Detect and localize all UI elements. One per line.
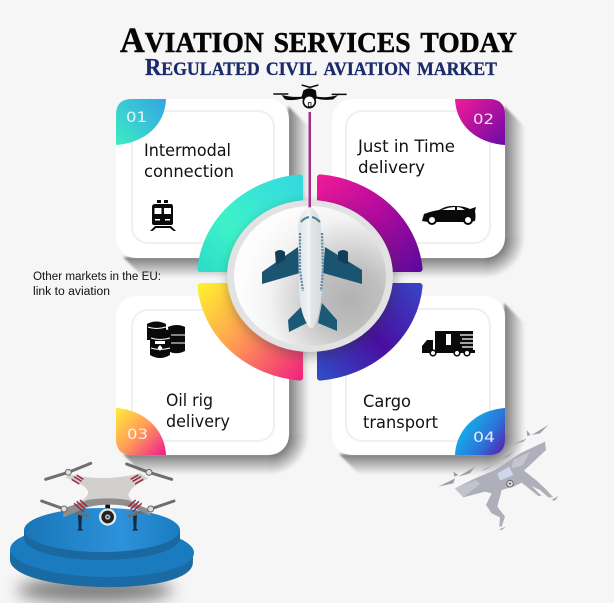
propellers: [42, 463, 174, 516]
icon: train: [150, 200, 176, 231]
panel: oil rig delivery: [116, 296, 289, 455]
drone: [42, 463, 174, 531]
icon: top drone: [273, 85, 347, 108]
panel: just in time delivery: [332, 99, 505, 258]
number 01: 01: [126, 110, 147, 126]
number 03: 03: [127, 427, 148, 443]
arm stripes: [72, 475, 143, 512]
label: intermodal connection: Intermodal: [144, 141, 231, 160]
engines: [275, 250, 348, 265]
panel: cargo transport: [332, 296, 505, 455]
panel: intermodal connection: [116, 99, 289, 258]
tail: [288, 303, 337, 332]
number tab 04: [455, 408, 505, 455]
number tab 02: [455, 99, 505, 145]
note: other markets: Other markets in the EU:: [33, 271, 161, 283]
label line: transport: transport: [363, 413, 439, 432]
lower disc: [9, 523, 195, 589]
label: oil rig: Oil rig: [166, 391, 213, 410]
icon: airplane: [262, 207, 362, 332]
blades: [438, 425, 558, 530]
lens: [507, 480, 513, 487]
drone body: [455, 442, 553, 527]
platform shadow: [17, 577, 173, 603]
segment: orange: [200, 286, 300, 378]
camera: [105, 505, 110, 510]
label line: delivery: delivery: [358, 158, 425, 177]
connector line: [308, 112, 311, 208]
label line: delivery: delivery: [166, 412, 230, 431]
segment: teal: [200, 177, 300, 269]
body: [63, 473, 151, 515]
note: other markets: link to aviation: [33, 286, 110, 298]
number 02: 02: [473, 112, 494, 128]
illustration: platform and drone: [9, 463, 195, 603]
card shadows: [123, 106, 525, 475]
fuselage: [298, 207, 322, 328]
note: other markets: [33, 271, 161, 298]
illustration: grey drone: [438, 425, 558, 530]
icon: oil barrels: [147, 322, 185, 358]
number tab 03: [116, 408, 166, 455]
label line: connection: connection: [144, 162, 234, 181]
label: just in time: Just in Time: [357, 137, 455, 156]
central segments: [200, 177, 420, 378]
wings: [262, 247, 362, 284]
windows: [301, 217, 320, 222]
number tab 01: [116, 99, 166, 145]
motors: [65, 469, 71, 475]
title: Aviation services today: [120, 15, 517, 61]
icon: cargo truck: [422, 331, 475, 356]
label: cargo: Cargo: [363, 392, 411, 411]
number 04: 04: [473, 430, 495, 446]
segment: magenta: [320, 177, 420, 269]
subtitle: Regulated civil aviation market: [145, 51, 497, 81]
legs: [77, 515, 138, 531]
segment: indigo: [320, 286, 420, 378]
icon: car: [422, 206, 476, 224]
upper disc: [24, 508, 180, 560]
central hub: [227, 200, 397, 358]
